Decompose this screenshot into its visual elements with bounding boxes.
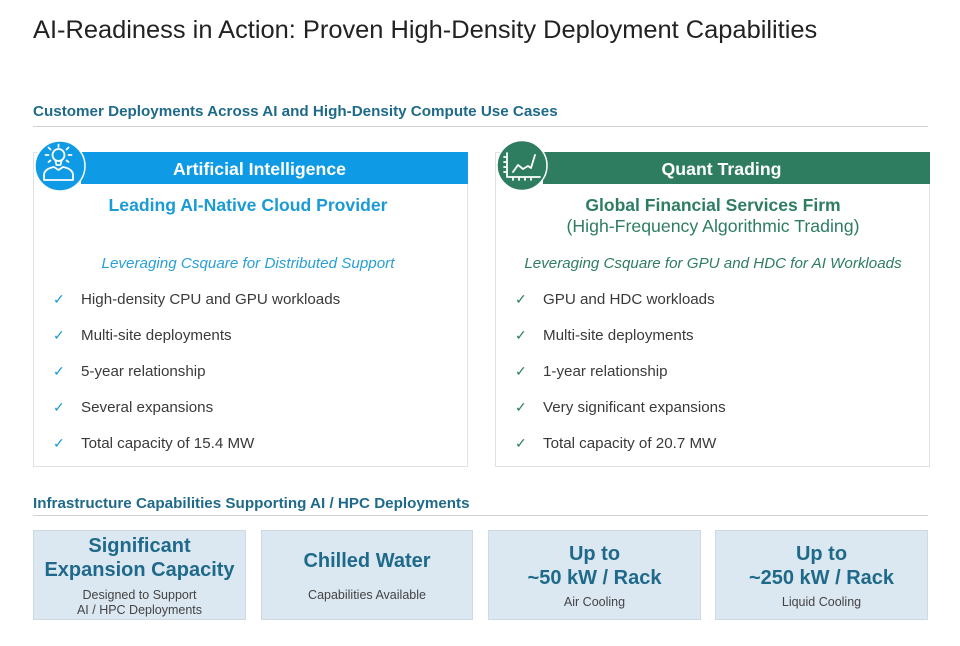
checklist: 5-year relationship xyxy=(81,363,206,380)
capability: air cooling: Air Cooling xyxy=(564,595,625,609)
capability: expansion capacity: Expansion Capacity xyxy=(44,559,235,581)
panel: artificial intelligence: ✓ xyxy=(53,435,65,451)
icon: person with light bulb xyxy=(36,142,86,190)
section heading: customer deployments: Customer Deployments Across AI and High-Density Compute Use Cases xyxy=(33,103,558,120)
tagline: Leveraging Csquare for GPU and HDC for AI Workloads xyxy=(524,255,902,272)
panel: quant trading: ✓ xyxy=(515,399,527,415)
panel: artificial intelligence: ✓ xyxy=(53,291,65,307)
capability: chilled water: Chilled Water xyxy=(303,550,431,572)
checklist xyxy=(53,291,340,452)
checklist: 1-year relationship xyxy=(543,363,668,380)
capability: expansion capacity: Significant xyxy=(88,535,191,557)
header bar: artificial intelligence xyxy=(81,152,468,184)
panel: artificial intelligence: ✓ xyxy=(53,399,65,415)
capability: air cooling xyxy=(488,530,701,620)
panel: quant trading: ✓ xyxy=(515,435,527,451)
capability: chilled water: Capabilities Available xyxy=(308,588,426,602)
checklist xyxy=(515,291,726,452)
checklist: High-density CPU and GPU workloads xyxy=(81,291,340,308)
panel: quant trading: ✓ xyxy=(515,363,527,379)
subheading: Leading AI-Native Cloud Provider xyxy=(109,195,387,215)
panel: artificial intelligence: ✓ xyxy=(53,363,65,379)
subheading: Global Financial Services Firm xyxy=(585,195,841,215)
capability: chilled water xyxy=(261,530,473,620)
panel: quant trading xyxy=(495,141,930,467)
capability: air cooling: Up to xyxy=(569,543,620,565)
subheading detail: (High-Frequency Algorithmic Trading) xyxy=(567,216,859,236)
capability: expansion capacity: Designed to Support xyxy=(83,588,196,602)
panel: quant trading: ✓ xyxy=(515,291,527,307)
icon: line chart xyxy=(498,141,548,190)
capability: liquid cooling: Liquid Cooling xyxy=(782,595,861,609)
header bar: artificial intelligence: Artificial Intelligence xyxy=(173,159,346,179)
panel: quant trading: ✓ xyxy=(515,327,527,343)
section heading: infrastructure capabilities: Infrastructure Capabilities Supporting AI / HPC Deployments xyxy=(33,495,470,512)
capability: air cooling: ~50 kW / Rack xyxy=(528,567,661,589)
checklist: Several expansions xyxy=(81,399,213,416)
capability: expansion capacity xyxy=(33,530,246,620)
panel: artificial intelligence: ✓ xyxy=(53,327,65,343)
panel border xyxy=(33,152,468,467)
capability: expansion capacity: AI / HPC Deployments xyxy=(77,603,202,617)
header bar: quant trading xyxy=(543,152,930,184)
capability: liquid cooling xyxy=(715,530,928,620)
checklist: Very significant expansions xyxy=(543,399,726,416)
panel: artificial intelligence xyxy=(33,142,468,467)
title: AI-Readiness in Action: Proven High-Density Deployment Capabilities xyxy=(33,16,817,44)
checklist: GPU and HDC workloads xyxy=(543,291,715,308)
checklist: Multi-site deployments xyxy=(81,327,232,344)
capability: liquid cooling: ~250 kW / Rack xyxy=(749,567,894,589)
checklist: Total capacity of 20.7 MW xyxy=(543,435,716,452)
capability: liquid cooling: Up to xyxy=(796,543,847,565)
header bar: quant trading: Quant Trading xyxy=(662,159,781,179)
tagline: Leveraging Csquare for Distributed Support xyxy=(102,255,394,272)
checklist: Multi-site deployments xyxy=(543,327,694,344)
panel border xyxy=(495,152,930,467)
checklist: Total capacity of 15.4 MW xyxy=(81,435,254,452)
